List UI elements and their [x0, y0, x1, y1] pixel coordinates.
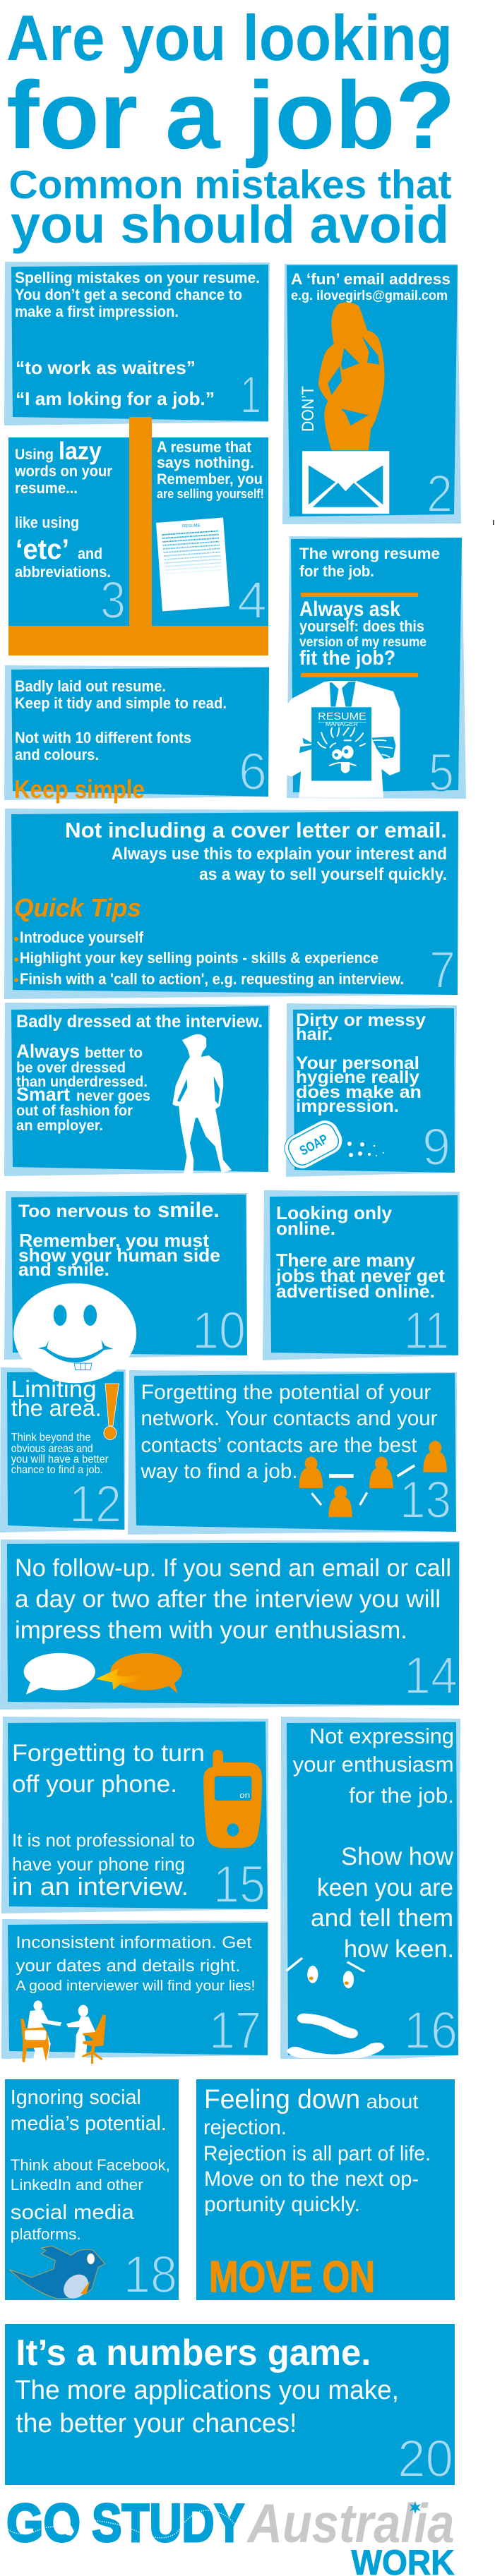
- panel 18: social media: Think about Facebook,: [11, 2156, 170, 2174]
- panel 3: lazy words: and: [78, 545, 102, 562]
- panel 8: badly dressed: be over dressed: [16, 1060, 126, 1076]
- panel 15: forgetting to turn off phone: [1, 1717, 268, 1913]
- panel 10: too nervous to smile: Too nervous to: [18, 1202, 151, 1221]
- panel 15: forgetting to turn off phone: 15: [213, 1855, 266, 1913]
- quick tips heading: Quick Tips: [14, 893, 141, 922]
- panel 5: wrong resume: The wrong resume: [299, 545, 440, 562]
- panel 11: looking only online: advertised online.: [276, 1281, 435, 1302]
- panel 11: looking only online: online.: [276, 1218, 335, 1239]
- panel 6: badly laid out resume: Not with 10 different fonts: [15, 729, 191, 746]
- panel 13: network: way to find a job.: [141, 1460, 298, 1483]
- panel 14: no follow-up: impress them with your enthusiasm.: [15, 1616, 407, 1644]
- panel 8: badly dressed: never goes: [76, 1088, 150, 1104]
- panel 15: forgetting to turn off phone: in an interview.: [12, 1872, 189, 1901]
- panel 16: not expressing enthusiasm: your enthusiasm: [293, 1752, 454, 1777]
- panel 18: social media: LinkedIn and other: [11, 2176, 143, 2194]
- panel 18: social media: 18: [124, 2245, 177, 2304]
- panel 10: too nervous to smile: smile.: [157, 1197, 220, 1222]
- panel 5: wrong resume: Always ask: [299, 598, 400, 621]
- panel 4: resume says nothing: 4: [237, 571, 267, 629]
- panel 17: inconsistent information: 17: [209, 2001, 261, 2060]
- panel 16: not expressing enthusiasm: 16: [404, 2001, 458, 2060]
- panel 10: too nervous to smile: and smile.: [18, 1259, 109, 1280]
- icon: man in shirt holding resume manager book: [286, 681, 400, 798]
- panel 19: feeling down: Rejection is all part of life.: [203, 2142, 431, 2165]
- panel 3: lazy words: Using: [15, 447, 54, 463]
- icon: person silhouette: [172, 1034, 232, 1174]
- panel 14: no follow-up: 14: [404, 1646, 458, 1705]
- panel 19: feeling down: rejection.: [203, 2116, 287, 2139]
- panel 12: limiting the area: you will have a better: [11, 1453, 109, 1465]
- panel 5: wrong resume: yourself: does this: [299, 617, 424, 635]
- panel 10: too nervous to smile: 10: [192, 1301, 246, 1360]
- hands: [302, 738, 313, 744]
- panel 7: cover letter: 7: [429, 941, 455, 999]
- panel 6: badly laid out resume: 6: [239, 742, 267, 801]
- panel 2: fun email address: [282, 264, 461, 524]
- panel 13: network: contacts’ contacts are the best: [141, 1434, 417, 1457]
- logo: go study australia work: [6, 2492, 455, 2576]
- icon: smiley face: [13, 1283, 136, 1383]
- panel 17: inconsistent information: A good interviewer will find your lies!: [16, 1978, 255, 1994]
- panel 16: not expressing enthusiasm: keen you are: [317, 1874, 453, 1901]
- panel 4: resume says nothing: are selling yourself!: [157, 487, 264, 501]
- icon: mobile phone: on: [239, 1791, 250, 1800]
- panel 4: resume says nothing: says nothing.: [157, 454, 254, 471]
- panel 12: limiting the area: Limiting: [11, 1376, 97, 1402]
- hair strokes, eyes, tongue: [318, 728, 365, 766]
- panel 15: forgetting to turn off phone: It is not professional to: [12, 1830, 195, 1851]
- panel 9: dirty or messy hair: does make an: [296, 1082, 422, 1102]
- title: for a job?: [6, 61, 455, 169]
- logo: go study australia work: GO: [6, 2493, 80, 2553]
- panel 1: spelling mistakes: “I am loking for a job.”: [16, 388, 215, 409]
- tiny stray mark: [493, 520, 494, 525]
- soap bubbles: [347, 1142, 384, 1157]
- panel 13: network: network. Your contacts and your: [141, 1407, 438, 1430]
- panel 10: too nervous to smile: [4, 1191, 247, 1383]
- panel 17: inconsistent information: Inconsistent information. Get: [16, 1933, 252, 1952]
- panel 5: wrong resume: version of my resume: [299, 635, 427, 650]
- panel 6: badly laid out resume: Badly laid out resume.: [15, 677, 166, 695]
- panel 18: social media: platforms.: [11, 2225, 81, 2243]
- panel 7: cover letter: Not including a cover letter or email.: [65, 818, 447, 842]
- panel 12: limiting the area: the area.: [11, 1395, 102, 1421]
- panel 2: fun email address: A ‘fun’ email address: [291, 270, 451, 288]
- icon: woman silhouette: [318, 303, 385, 450]
- panel 16: not expressing enthusiasm: Show how: [341, 1843, 454, 1870]
- panel 10: too nervous to smile: Remember, you must: [19, 1230, 209, 1251]
- panel 16: not expressing enthusiasm: how keen.: [344, 1935, 454, 1963]
- keep simple: Keep simple: [14, 775, 145, 804]
- panel 3: lazy words: abbreviations.: [15, 563, 111, 581]
- panel 11: looking only online: jobs that never get: [275, 1265, 445, 1286]
- panel 9: dirty or messy hair: [280, 1003, 457, 1177]
- panel 9: dirty or messy hair: Your personal: [296, 1053, 419, 1073]
- panel 11: looking only online: 11: [404, 1301, 449, 1360]
- panel 12: limiting the area: Think beyond the: [11, 1432, 91, 1444]
- panel 8: badly dressed: Smart: [16, 1084, 70, 1105]
- panel 1: spelling mistakes: [4, 262, 270, 425]
- panel 18: social media: social media: [11, 2201, 135, 2224]
- panel 19: feeling down: about: [366, 2091, 419, 2112]
- panel 9: dirty or messy hair: hair.: [296, 1024, 333, 1044]
- panel 8: badly dressed: than underdressed.: [16, 1074, 148, 1090]
- panel 1: spelling mistakes: Spelling mistakes on your resume.: [15, 269, 260, 286]
- panel 3: lazy words: like using: [15, 514, 79, 531]
- panel 14: no follow-up: [0, 1540, 460, 1710]
- panel 12: limiting the area: obvious areas and: [11, 1443, 93, 1455]
- icon: envelope: [302, 451, 389, 514]
- title: Are you looking: [6, 3, 453, 74]
- panel 12: limiting the area: 12: [69, 1475, 121, 1533]
- panel 3: lazy words: lazy: [59, 437, 102, 465]
- panel 11: looking only online: Looking only: [276, 1202, 393, 1223]
- panel 16: not expressing enthusiasm: Not expressing: [309, 1724, 454, 1748]
- panel 19: feeling down: Feeling down: [204, 2085, 360, 2115]
- panel 5: wrong resume: [286, 536, 466, 802]
- quick tips list: Highlight your key selling points - skills & experience: [20, 949, 378, 967]
- panel 3: lazy words: resume...: [15, 479, 78, 497]
- panel 4: resume says nothing: [152, 437, 268, 629]
- panel 1: spelling mistakes: You don’t get a second chance to: [15, 286, 242, 303]
- panel 19: feeling down: Move on to the next op-: [204, 2167, 419, 2191]
- move on callout: MOVE ON: [209, 2253, 375, 2302]
- panel 1: spelling mistakes: make a first impression.: [15, 303, 179, 320]
- panel 16: not expressing enthusiasm: and tell them: [311, 1904, 453, 1932]
- icon: mobile phone: [203, 1750, 262, 1848]
- panel 5: wrong resume: for the job.: [299, 562, 374, 580]
- panel 8: badly dressed: out of fashion for: [16, 1103, 133, 1119]
- panel 1: spelling mistakes: 1: [240, 365, 261, 424]
- title: Common mistakes that: [8, 162, 452, 207]
- panel 8: badly dressed: an employer.: [16, 1118, 103, 1134]
- logo: go study australia work: STUDY: [92, 2493, 244, 2553]
- panel 9: dirty or messy hair: 9: [422, 1118, 451, 1176]
- quick tips list: [14, 929, 404, 988]
- panel 17: inconsistent information: [1, 1919, 268, 2064]
- panel 4: resume says nothing: Remember, you: [157, 471, 263, 488]
- panel 13: network: 13: [400, 1470, 451, 1529]
- panel 8: badly dressed: better to: [85, 1045, 143, 1061]
- icon: man in shirt holding resume manager book: MANAGER: [326, 720, 358, 727]
- panel 19: feeling down: portunity quickly.: [204, 2193, 360, 2216]
- icon: speech bubbles: [24, 1653, 182, 1695]
- panel 15: forgetting to turn off phone: Forgetting to turn: [12, 1740, 205, 1767]
- dotted route line: [8, 2510, 236, 2538]
- panel 3: lazy words: words on your: [14, 462, 112, 480]
- panel 20: numbers game: The more applications you make,: [15, 2376, 399, 2405]
- logo: go study australia work: Australia: [246, 2492, 455, 2554]
- panel 6: badly laid out resume: [4, 665, 269, 804]
- panel 3: lazy words: [8, 437, 129, 629]
- icon: australia map: [56, 2523, 74, 2536]
- panel 7: cover letter: as a way to sell yourself quickly.: [199, 865, 447, 884]
- panel 10: too nervous to smile: show your human side: [18, 1245, 220, 1266]
- panel 9: dirty or messy hair: impression.: [296, 1096, 399, 1116]
- panel 1: spelling mistakes: “to work as waitres”: [16, 357, 196, 378]
- orange frame: [8, 417, 268, 655]
- panel 8: badly dressed: Always: [16, 1041, 80, 1062]
- panel 11: looking only online: [263, 1190, 460, 1360]
- panel 18: social media: media’s potential.: [11, 2112, 167, 2135]
- title: [6, 3, 455, 254]
- icon: contacts network: [299, 1441, 447, 1517]
- panel 3: lazy words: ‘etc’: [16, 534, 69, 565]
- panel 2: fun email address: 2: [427, 464, 453, 523]
- panel 16: not expressing enthusiasm: for the job.: [349, 1783, 454, 1808]
- panel 20: numbers game: 20: [398, 2429, 453, 2488]
- panel 20: numbers game: [5, 2324, 455, 2488]
- panel 12: limiting the area: [0, 1367, 126, 1533]
- panels 3 and 4 with orange frame: [8, 417, 268, 655]
- panel 5: wrong resume: 5: [429, 743, 454, 802]
- quick tips list: Finish with a 'call to action', e.g. requesting an interview.: [20, 970, 404, 988]
- panel 19: feeling down: [196, 2079, 455, 2302]
- panel 14: no follow-up: a day or two after the interview you will: [15, 1585, 441, 1613]
- icon: exclamation mark: [104, 1384, 119, 1439]
- icon: star: [410, 2501, 421, 2514]
- panel 2: fun email address: e.g. ilovegirls@gmail.com: [291, 289, 448, 303]
- panel 15: forgetting to turn off phone: off your phone.: [12, 1771, 177, 1798]
- panel 13: network: Forgetting the potential of your: [141, 1381, 431, 1404]
- panel 6: badly laid out resume: and colours.: [15, 746, 99, 763]
- icon: soap bar: SOAP: [297, 1132, 330, 1159]
- title: you should avoid: [11, 195, 449, 254]
- panel 16: not expressing enthusiasm: [280, 1717, 460, 2060]
- panel 15: forgetting to turn off phone: have your phone ring: [12, 1854, 185, 1875]
- panel 4: resume says nothing: A resume that: [157, 438, 252, 456]
- icon: handshake interview: [20, 2000, 106, 2064]
- panel 18: social media: [5, 2079, 179, 2304]
- panel 20: numbers game: It’s a numbers game.: [16, 2333, 371, 2374]
- panel 6: badly laid out resume: Keep it tidy and simple to read.: [15, 694, 227, 712]
- quick tips list: Introduce yourself: [20, 929, 144, 946]
- icon: resume sheet: RESUME: [182, 524, 201, 528]
- panel 12: limiting the area: chance to find a job.: [11, 1464, 103, 1476]
- panel 14: no follow-up: No follow-up. If you send an email or call: [15, 1554, 451, 1582]
- panel 9: dirty or messy hair: hygiene really: [296, 1068, 419, 1087]
- icon: worried face: [287, 1958, 385, 2058]
- panel 3: lazy words: 3: [100, 571, 126, 629]
- panel 5: wrong resume: fit the job?: [299, 647, 395, 670]
- panel 20: numbers game: the better your chances!: [16, 2409, 297, 2438]
- panel 7: cover letter: [4, 809, 458, 999]
- icon: blue bird: [9, 2246, 105, 2304]
- icon: man in shirt holding resume manager book: RESUME: [318, 711, 366, 722]
- rotated label: don't: DON’T: [299, 386, 318, 432]
- panel 7: cover letter: Always use this to explain your interest and: [112, 845, 447, 864]
- icon: soap bar: [280, 1115, 347, 1173]
- panel 8: badly dressed: Badly dressed at the interview.: [16, 1012, 263, 1032]
- panel 9: dirty or messy hair: Dirty or messy: [296, 1010, 426, 1030]
- panel 13: network: [128, 1370, 457, 1535]
- panel 8: badly dressed: [4, 1003, 270, 1176]
- panel 17: inconsistent information: your dates and details right.: [16, 1957, 240, 1976]
- panel 11: looking only online: There are many: [276, 1250, 416, 1271]
- icon: resume sheet: [156, 518, 229, 611]
- panel 18: social media: Ignoring social: [11, 2086, 141, 2109]
